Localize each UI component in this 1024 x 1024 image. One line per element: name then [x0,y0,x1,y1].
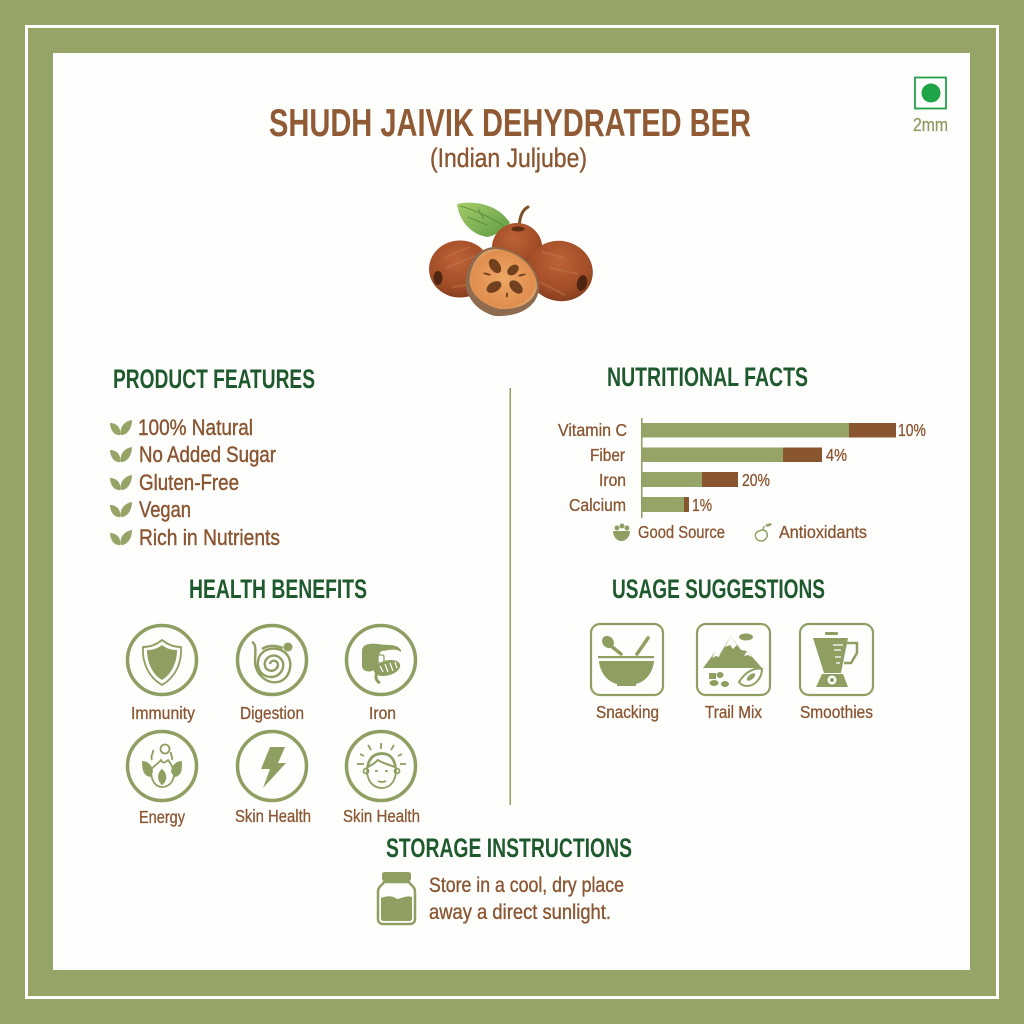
icon: blender [813,632,857,687]
icon: storage jar [378,872,415,924]
heading: storage instructions: STORAGE INSTRUCTIONS [386,833,632,863]
text: storage instructions: Store in a cool, dry place [429,874,624,897]
illustration: ber fruits [429,203,600,316]
bar chart: nutritional facts: 10% [898,420,926,440]
title: SHUDH JAIVIK DEHYDRATED BER [269,102,751,145]
icon: digestion spiral [252,642,292,682]
badge: vegetarian mark with 2mm: 2mm [913,115,948,135]
bar chart: nutritional facts: 20% [742,470,770,490]
bar chart: nutritional facts: Iron [599,470,626,490]
panel: health benefits icons: Immunity [131,703,195,723]
panel: feature list: Rich in Nutrients [139,525,280,550]
icon: lightning bolt [261,747,286,788]
legend: good source and antioxidants [613,522,867,542]
subtitle: (Indian Juljube) [430,143,587,173]
panel: usage suggestions: Smoothies [800,702,873,722]
bar chart: nutritional facts: Fiber [590,445,625,465]
panel: health benefits icons: Skin Health [343,806,420,826]
bar chart: nutritional facts [558,418,926,518]
panel: health benefits icons: Skin Health [235,806,311,826]
panel: usage suggestions: Trail Mix [705,702,762,722]
panel: health benefits icons: Iron [369,703,396,723]
panel: health benefits icons: Digestion [240,703,304,723]
legend: good source and antioxidants: Good Source [638,522,725,542]
panel: feature list: Vegan [139,497,191,522]
bar chart: nutritional facts: Vitamin C [558,420,627,440]
heading: product features: PRODUCT FEATURES [113,364,315,394]
icon: mountain and trail mix [703,634,762,687]
panel: usage suggestions [591,624,873,722]
bar chart: nutritional facts: Calcium [569,495,626,515]
bar chart: nutritional facts: 4% [826,445,847,465]
heading: nutritional facts: NUTRITIONAL FACTS [607,362,808,392]
panel: feature list: 100% Natural [138,415,253,440]
icon: bowl and spoons [598,633,654,686]
text: storage instructions [429,874,624,924]
panel: feature list: Gluten-Free [139,470,239,495]
icon: energy flame and leaves [143,744,181,787]
panel: feature list [110,415,280,550]
panel: feature list: No Added Sugar [139,442,276,467]
heading: health benefits: HEALTH BENEFITS [189,574,367,604]
icon: face with rays [357,743,406,788]
bar chart: nutritional facts: 1% [692,495,712,515]
divider [510,388,511,805]
panel: health benefits icons [128,626,420,827]
badge: vegetarian mark with 2mm [913,78,948,135]
panel: usage suggestions: Snacking [596,702,659,722]
icon: digestive organs [362,644,402,683]
icon: shield [143,640,181,685]
panel: health benefits icons: Energy [139,807,185,827]
text: storage instructions: away a direct sunlight. [429,901,611,924]
heading: usage suggestions: USAGE SUGGESTIONS [612,574,825,604]
legend: good source and antioxidants: Antioxidants [779,522,867,542]
